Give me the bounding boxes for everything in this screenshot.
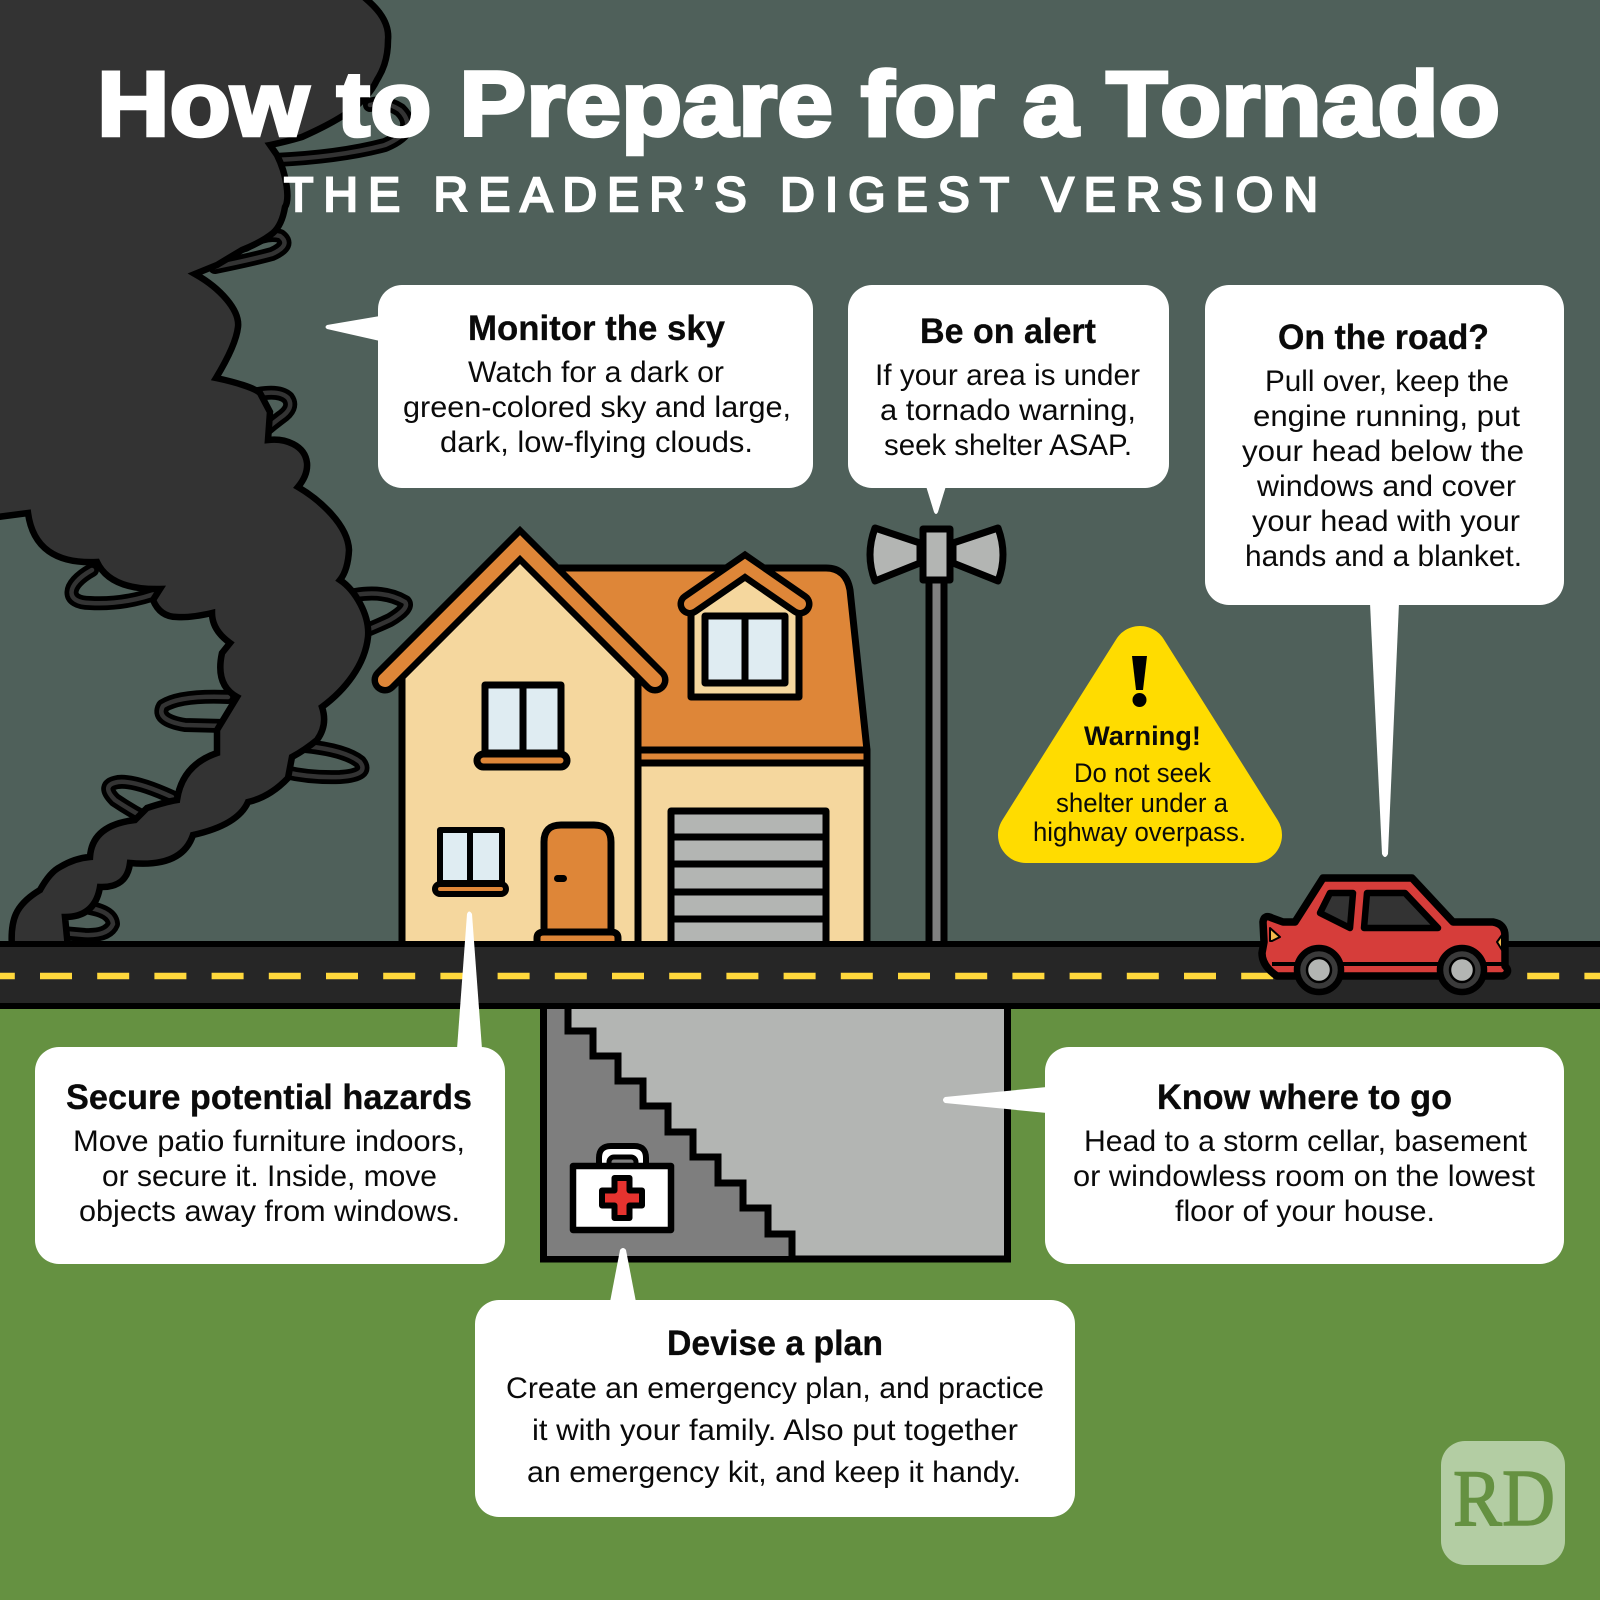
panel: know where to go: or windowless room on the lowest — [1073, 1160, 1536, 1193]
panel: devise a plan: an emergency kit, and keep it handy. — [527, 1456, 1021, 1489]
panel: warning sign: Warning! — [1084, 721, 1201, 751]
tornado cloud — [0, 0, 388, 948]
panel: monitor the sky — [326, 285, 813, 488]
car — [1262, 878, 1508, 992]
door — [537, 825, 618, 945]
panel: devise a plan: it with your family. Also put together — [532, 1414, 1018, 1447]
panel: secure potential hazards: Move patio furniture indoors, — [73, 1125, 465, 1158]
roof: main orange roof — [555, 568, 867, 750]
upper window — [477, 685, 567, 767]
panel: secure potential hazards: objects away from windows. — [79, 1195, 460, 1228]
lower window — [435, 830, 506, 894]
panel: be on alert: If your area is under — [875, 359, 1140, 392]
panel: warning sign: shelter under a — [1056, 788, 1228, 818]
panel: on the road: your head with your — [1252, 505, 1520, 538]
icon: exclamation mark — [1132, 656, 1147, 707]
road — [0, 941, 1600, 1009]
roof trim: gable — [385, 545, 655, 680]
panel: on the road: windows and cover — [1256, 470, 1516, 503]
house — [385, 545, 867, 946]
panel: be on alert: Be on alert — [920, 312, 1096, 351]
basement — [544, 1005, 1008, 1259]
panel: be on alert: a tornado warning, — [880, 394, 1136, 427]
panel: secure potential hazards: Secure potential hazards — [66, 1078, 472, 1117]
panel: monitor the sky: Monitor the sky — [468, 309, 726, 348]
panel: devise a plan: Create an emergency plan, and practice — [506, 1372, 1044, 1405]
band: roof eave — [638, 750, 867, 763]
wall: garage section — [638, 763, 867, 945]
dormer — [690, 566, 800, 697]
panel: know where to go: floor of your house. — [1175, 1195, 1435, 1228]
panel: on the road: hands and a blanket. — [1245, 540, 1522, 573]
wall: main gable section — [402, 550, 638, 945]
panel: monitor the sky: Watch for a dark or — [468, 356, 724, 389]
panel: be on alert — [848, 285, 1169, 514]
logo: RD: RD — [1453, 1455, 1555, 1543]
panel: monitor the sky: dark, low-flying clouds. — [440, 426, 753, 459]
tornado debris rings — [62, 103, 407, 935]
title: How to Prepare for a Tornado — [97, 54, 1500, 156]
panel: secure potential hazards: or secure it. Inside, move — [102, 1160, 437, 1193]
panel: devise a plan: Devise a plan — [667, 1324, 883, 1363]
logo: RD — [1441, 1441, 1565, 1565]
subtitle: THE READER’S DIGEST VERSION — [284, 169, 1318, 222]
panel: warning sign: Do not seek — [1074, 758, 1212, 788]
basement stairs — [547, 1005, 792, 1256]
panel: know where to go — [943, 1047, 1564, 1264]
panel: on the road: engine running, put — [1253, 400, 1521, 433]
panel: devise a plan — [475, 1248, 1075, 1517]
panel: on the road — [1205, 285, 1564, 857]
garage door — [671, 811, 826, 946]
panel: know where to go: Know where to go — [1157, 1078, 1452, 1117]
panel: on the road: On the road? — [1278, 318, 1489, 357]
icon: first aid kit — [573, 1146, 671, 1230]
panel: secure potential hazards — [35, 912, 505, 1264]
panel: warning sign — [1026, 654, 1254, 847]
panel: know where to go: Head to a storm cellar, basement — [1084, 1125, 1528, 1158]
siren tower — [870, 528, 1003, 945]
panel: monitor the sky: green-colored sky and large, — [403, 391, 791, 424]
panel: on the road: your head below the — [1242, 435, 1524, 468]
panel: warning sign: highway overpass. — [1033, 817, 1246, 847]
panel: on the road: Pull over, keep the — [1265, 365, 1509, 398]
panel: be on alert: seek shelter ASAP. — [884, 429, 1132, 462]
